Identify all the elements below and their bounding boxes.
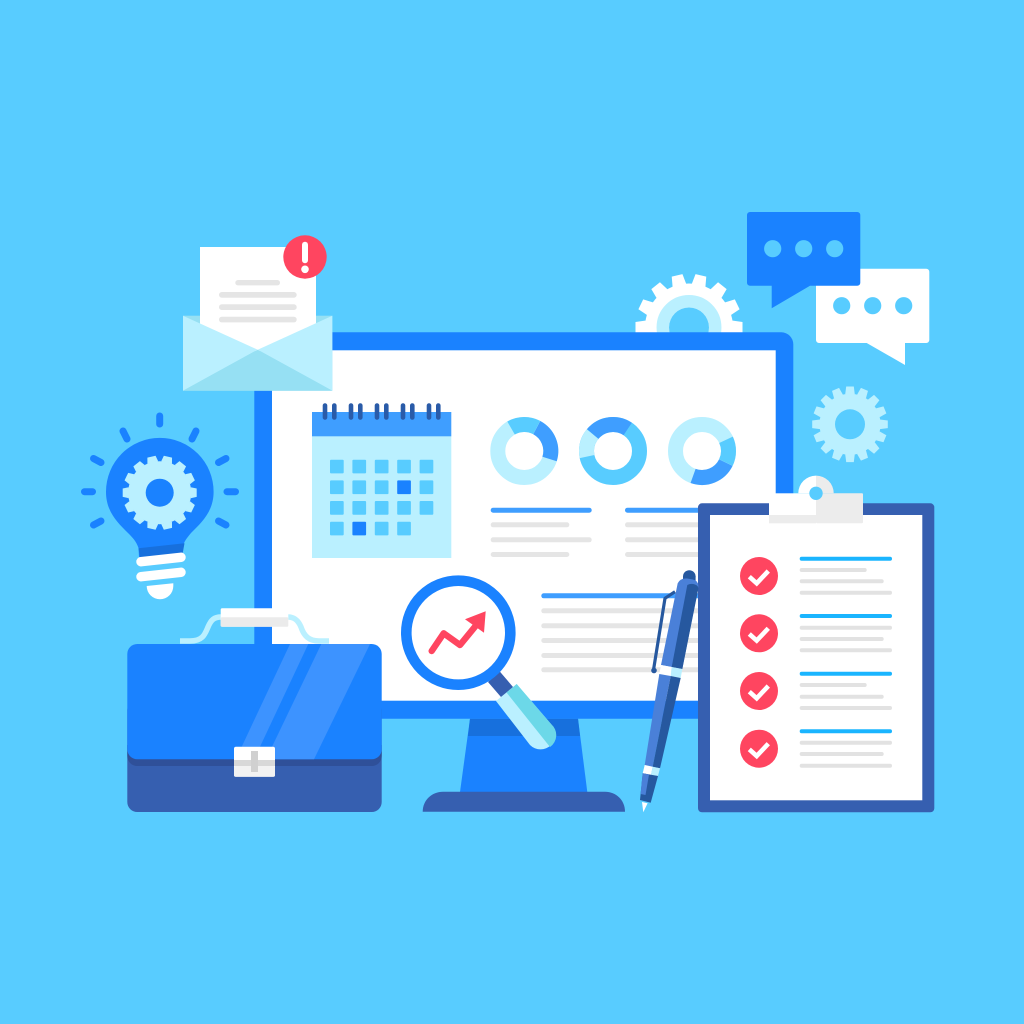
text block: lower report lines xyxy=(541,593,706,672)
magnifier lens xyxy=(406,581,510,685)
icon: light bulb with gear xyxy=(84,416,236,599)
donut chart 2 xyxy=(576,414,650,488)
text block: under donut 2 xyxy=(625,508,726,557)
icon: pen xyxy=(640,570,698,812)
pen upper ring xyxy=(659,665,682,678)
checklist item 2 xyxy=(740,614,892,652)
checklist item 1 xyxy=(740,557,892,595)
briefcase body xyxy=(127,700,382,812)
pen lower ring xyxy=(643,765,660,776)
icon: magnifying glass with growth arrow xyxy=(406,581,556,749)
pen clip xyxy=(654,592,675,670)
monitor stand xyxy=(423,719,625,812)
letter xyxy=(200,247,316,351)
briefcase handle xyxy=(180,608,329,641)
donut chart 3 xyxy=(667,416,737,486)
text block: under donut 1 xyxy=(491,508,592,557)
bulb screw base xyxy=(141,557,181,599)
icon: blue speech bubble xyxy=(747,212,860,308)
alert badge xyxy=(283,235,327,279)
checklist item 3 xyxy=(740,672,892,710)
icon: white speech bubble xyxy=(816,269,929,365)
clipboard board xyxy=(698,503,934,812)
donut chart 1 xyxy=(488,415,560,487)
bulb rays xyxy=(84,416,236,525)
briefcase glare xyxy=(242,644,370,759)
envelope back xyxy=(183,316,332,391)
red growth arrow xyxy=(432,611,486,651)
pen cap knob xyxy=(683,570,696,583)
clipboard clip xyxy=(769,476,863,523)
magnifier grip xyxy=(496,684,556,749)
icon: light gear on the right xyxy=(812,386,888,462)
briefcase clasp xyxy=(234,747,275,777)
magnifier neck xyxy=(488,672,519,704)
monitor frame xyxy=(254,332,793,719)
icon: gear behind monitor xyxy=(636,274,742,372)
bulb gear xyxy=(123,455,197,530)
icon: briefcase xyxy=(127,608,382,812)
envelope flaps xyxy=(183,316,332,391)
panel: clipboard checklist xyxy=(698,476,934,812)
pen upper barrel xyxy=(661,578,698,669)
icon: envelope with letter and alert xyxy=(183,235,332,391)
monitor screen xyxy=(272,350,776,701)
pen tip xyxy=(640,773,658,812)
pen lower barrel xyxy=(645,674,671,767)
calendar xyxy=(312,406,451,558)
clipboard paper xyxy=(710,515,922,800)
bulb glass xyxy=(106,438,214,557)
panel: monitor xyxy=(254,332,793,812)
checklist item 4 xyxy=(740,729,892,768)
